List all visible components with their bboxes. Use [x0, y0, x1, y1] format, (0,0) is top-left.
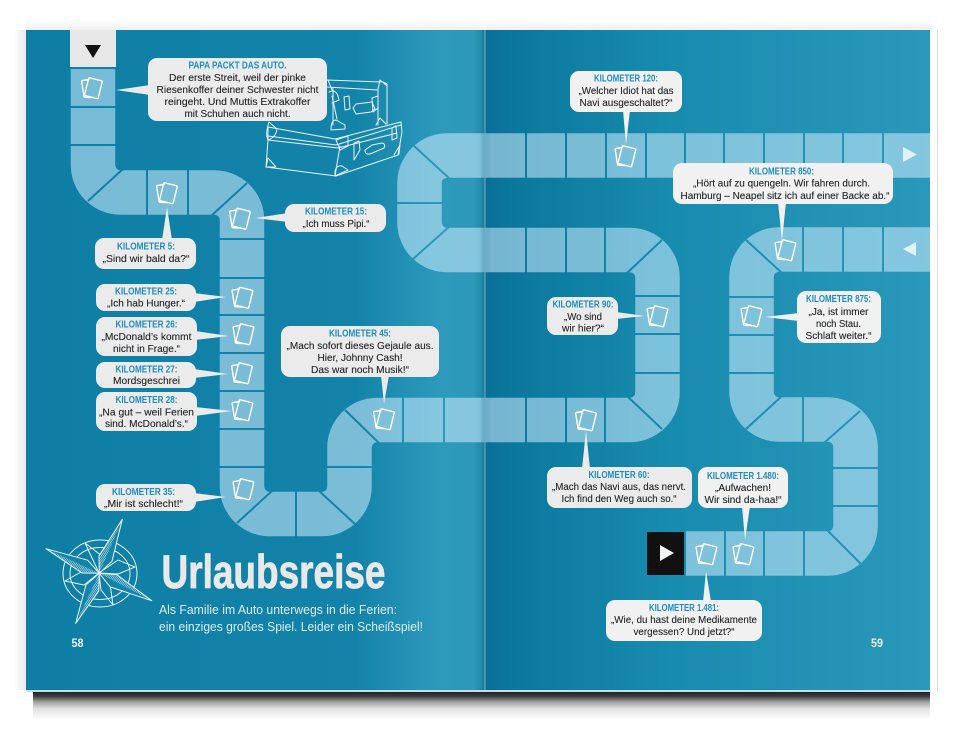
callout: Kilometer 5: „Sind wir bald da?“	[102, 254, 190, 265]
spine fold	[480, 30, 492, 690]
callout: Kilometer 120: Navi ausgeschaltet?“	[580, 98, 673, 109]
callout: Kilometer 45	[281, 326, 439, 404]
callout: Kilometer 26: nicht in Frage.“	[113, 344, 181, 355]
callout: Kilometer 1.481	[606, 571, 762, 641]
callout: Kilometer 60: KILOMETER 60:	[588, 470, 650, 481]
track: first long path	[93, 69, 930, 514]
callout: Kilometer 35: „Mir ist schlecht!“	[104, 499, 184, 510]
callout: Kilometer 60: Ich find den Weg auch so.“	[562, 494, 677, 505]
callout: Kilometer 850: KILOMETER 850:	[749, 166, 814, 178]
callout: Kilometer 120	[570, 71, 682, 145]
title: Urlaubsreise	[162, 545, 386, 598]
continue arrow right	[903, 147, 917, 162]
card icons	[82, 78, 796, 565]
callout: Kilometer 15: KILOMETER 15:	[305, 207, 367, 218]
callout: Kilometer 35: KILOMETER 35:	[112, 487, 175, 498]
callout: Kilometer 1.480: „Aufwachen!	[715, 483, 771, 494]
callout: Kilometer 60: „Mach das Navi aus, das nervt.	[552, 482, 686, 493]
callout: Kilometer 875: noch Stau.	[816, 319, 861, 330]
callout: Kilometer 25	[96, 284, 226, 311]
track: second path to the finish	[686, 250, 930, 554]
callout: Kilometer 28	[96, 392, 232, 431]
start cell with down arrow	[70, 30, 116, 67]
callout: Kilometer 27: Mordsgeschrei	[113, 376, 180, 387]
continue arrow left	[903, 242, 916, 256]
callout: Papa packt das Auto	[116, 58, 327, 121]
callout: Kilometer 27: KILOMETER 27:	[116, 365, 178, 376]
callout: Kilometer 45: KILOMETER 45:	[329, 329, 391, 340]
suitcases illustration	[266, 80, 402, 176]
callout: Kilometer 26	[96, 317, 229, 356]
callout: Kilometer 5	[95, 207, 196, 269]
callout: Kilometer 875: KILOMETER 875:	[806, 294, 871, 305]
callout: Kilometer 850: Hamburg – Neapel sitz ich auf einer Backe ab.“	[680, 191, 890, 202]
callout: Papa packt das Auto: Riesenkoffer deiner Schwester nicht	[156, 85, 319, 96]
callout: Kilometer 45: Hier, Johnny Cash!	[318, 353, 402, 364]
callout: Kilometer 15	[255, 204, 386, 232]
callout: Kilometer 875: Schlaft weiter.“	[806, 331, 872, 342]
callout: Kilometer 26: „McDonald’s kommt	[102, 332, 192, 343]
left page background	[26, 30, 485, 690]
callout: Kilometer 35	[96, 484, 226, 511]
callout: Papa packt das Auto: reingeht. Und Muttis Extrakoffer	[164, 97, 311, 108]
right page background	[485, 30, 930, 690]
callout: Kilometer 90: KILOMETER 90:	[552, 300, 614, 311]
callout: Kilometer 1.480	[698, 467, 788, 540]
callout: Kilometer 25: „Ich hab Hunger.“	[107, 298, 186, 310]
callout: Kilometer 5: KILOMETER 5:	[117, 242, 175, 252]
callout: Kilometer 90	[547, 297, 645, 335]
callout: Kilometer 45: „Mach sofort dieses Gejaule aus.	[286, 341, 434, 352]
callout: Kilometer 1.481: „Wie, du hast deine Medikamente	[611, 615, 757, 626]
callout: Papa packt das Auto: mit Schuhen auch nicht.	[184, 109, 290, 120]
subtitle text: Als Familie im Auto unterwegs in die Ferien:	[159, 602, 397, 617]
callout: Kilometer 28: KILOMETER 28:	[116, 395, 178, 406]
page number 59: 59	[871, 636, 883, 650]
page number 58: 58	[72, 636, 84, 650]
callout: Kilometer 1.481: KILOMETER 1.481:	[649, 603, 719, 614]
callout: Kilometer 60	[547, 430, 692, 508]
callout: Kilometer 26: KILOMETER 26:	[116, 320, 178, 331]
subtitle text: ein einziges großes Spiel. Leider ein Scheißspiel!	[159, 619, 423, 634]
callout: Papa packt das Auto: PAPA PACKT DAS AUTO.	[188, 61, 287, 72]
callout: Kilometer 120: „Welcher Idiot hat das	[578, 86, 674, 97]
subtitle text	[159, 602, 423, 634]
callout: Kilometer 120: KILOMETER 120:	[594, 74, 658, 85]
callout: Kilometer 875: „Ja, ist immer	[808, 307, 869, 318]
callout: Kilometer 850: „Hört auf zu quengeln. Wir fahren durch.	[693, 178, 870, 190]
callout: Kilometer 1.481: vergessen? Und jetzt?“	[634, 627, 735, 638]
callout: Kilometer 15: „Ich muss Pipi.“	[302, 219, 370, 230]
callout: Kilometer 28: „Na gut – weil Ferien	[99, 407, 194, 418]
callout: Kilometer 25: KILOMETER 25:	[115, 286, 177, 298]
finish cell black with play arrow	[647, 532, 684, 575]
callout: Kilometer 27	[96, 362, 228, 388]
game board track	[93, 69, 930, 554]
callout: Papa packt das Auto: Der erste Streit, weil der pinke	[169, 73, 306, 84]
callout: Kilometer 1.480: KILOMETER 1.480:	[707, 471, 779, 482]
callout: Kilometer 850	[673, 163, 893, 241]
page bottom edge	[26, 690, 930, 692]
callout: Kilometer 90: wir hier?“	[561, 324, 605, 334]
callout: Kilometer 1.480: Wir sind da-haa!“	[704, 495, 782, 506]
callout: Kilometer 875	[765, 291, 881, 343]
callout: Kilometer 90: „Wo sind	[564, 312, 602, 323]
icon: compass rose	[46, 519, 152, 623]
callout: Kilometer 45: Das war noch Musik!“	[311, 365, 410, 376]
callout: Kilometer 28: sind. McDonald’s.“	[105, 419, 189, 430]
